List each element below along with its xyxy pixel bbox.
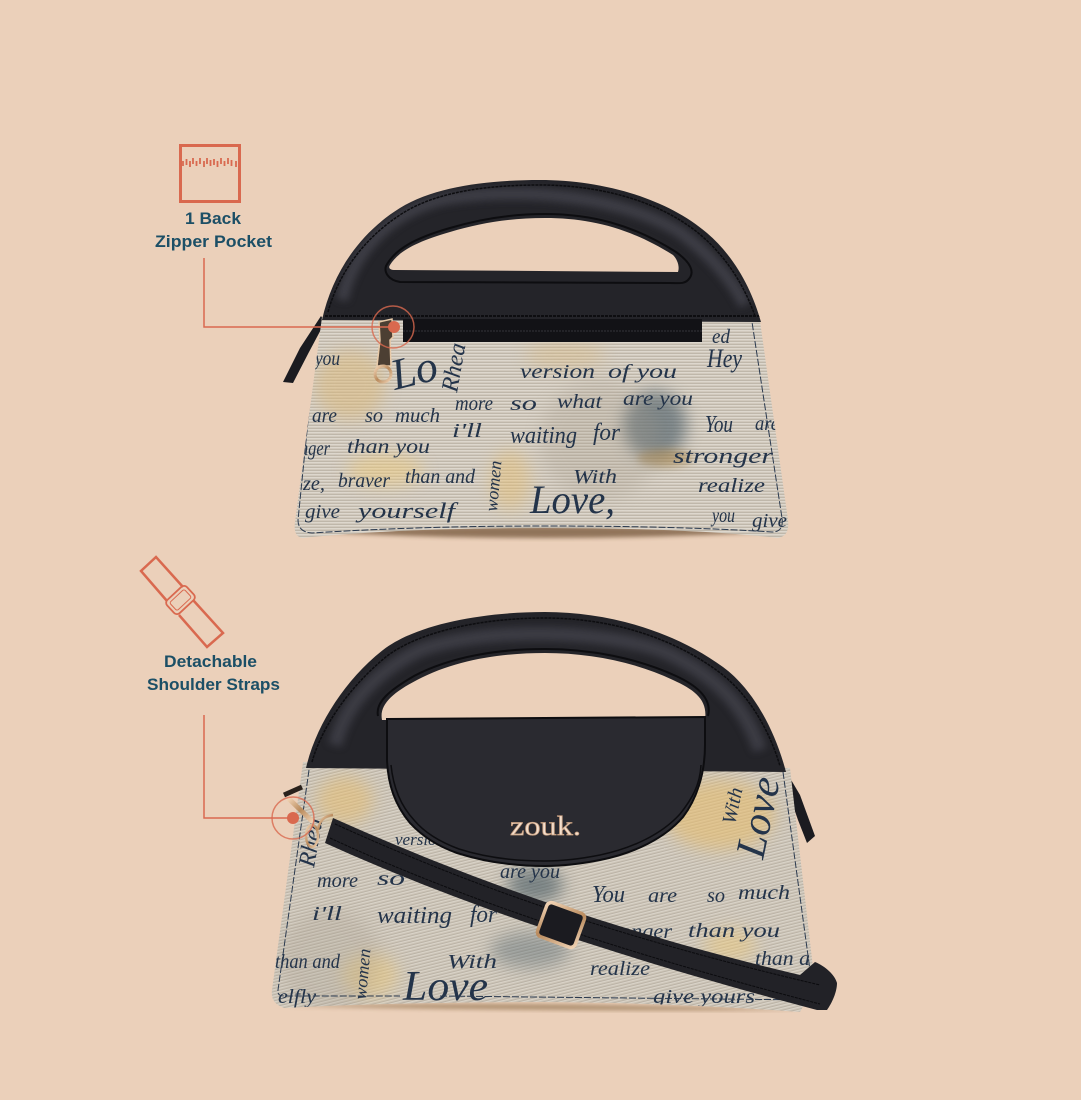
- bag 1 zipper: [403, 319, 702, 342]
- bag 2 handwriting print: realize: [590, 958, 650, 980]
- bag 2 side tab: [790, 778, 815, 843]
- bag 1 handwriting print: Love,: [529, 477, 615, 522]
- bag 2 handwriting print: You: [592, 882, 625, 908]
- bag 2 handwriting print: much: [738, 882, 790, 904]
- bag 2 strap: [325, 818, 837, 1010]
- bag 1 handwriting print: braver: [338, 470, 390, 492]
- bag 1 zipper tab: [283, 316, 325, 383]
- bag 1 handwriting print: are: [312, 405, 337, 427]
- bag 2 flap shading and stitching: [390, 722, 702, 861]
- bag 1 handwriting print: give: [752, 510, 787, 532]
- bag 2 front flap: [387, 717, 705, 866]
- bag 2 logo: zouk: zouk.: [510, 811, 581, 841]
- bag 2 shadow: [285, 1004, 800, 1010]
- bag 1 black handle: [322, 180, 761, 322]
- bag 1 handwriting print: than and: [405, 466, 476, 488]
- bag 1 handwriting print: more: [455, 393, 493, 415]
- bag 2 handwriting print: so: [377, 868, 405, 890]
- bag 1 handwriting print: women: [481, 460, 505, 512]
- bag 1 handwriting print: of you: [608, 361, 677, 383]
- bag 2 handwriting print: are: [648, 885, 677, 907]
- bag 1 zipper pull: [375, 319, 393, 382]
- bag 1 handwriting print: than you: [347, 436, 430, 458]
- bag 2 handwriting print: are you: [500, 861, 560, 883]
- bag 2: front view: [265, 612, 837, 1020]
- bag 2 handwriting print: than and: [275, 951, 341, 973]
- bag 2 handwriting print: onger: [620, 921, 672, 943]
- bag 1 handwriting print: what: [557, 391, 603, 413]
- bag 2 handle highlights and stitching: [312, 618, 780, 766]
- bag 1 handwriting print: You: [705, 412, 733, 438]
- bag 1 handwriting print: yourself: [355, 498, 459, 523]
- label: Detachable Shoulder Straps: Shoulder Straps: [147, 675, 280, 694]
- label: Detachable Shoulder Straps: Detachable: [164, 652, 257, 671]
- bag 1 handwriting print: you: [313, 348, 340, 370]
- bag 1 handwriting print: Rhea: [437, 341, 471, 395]
- bag 2 handwriting print: for: [470, 902, 498, 928]
- bag 2 handwriting print: elfly: [278, 986, 316, 1008]
- label: 1 Back Zipper Pocket: [155, 209, 272, 251]
- bag 2 handwriting print: i'll: [312, 903, 343, 925]
- bag 2 handwriting print: Rhea: [294, 816, 328, 870]
- bag 2 handwriting print: Love: [402, 964, 488, 1010]
- bag 1 handwriting print: are you: [623, 388, 693, 410]
- bag 1 handwriting print: realize: [698, 475, 765, 497]
- bag 1 handwriting print: [298, 322, 787, 533]
- callout: zipper pocket line: [204, 258, 414, 348]
- bag 1 handwriting print: for: [593, 420, 621, 446]
- bag 1 shadow: [320, 526, 770, 538]
- bag 2 handwriting print: than you: [688, 920, 780, 942]
- icon: zipper pocket: [180, 146, 240, 202]
- label: 1 Back Zipper Pocket: Zipper Pocket: [155, 232, 272, 251]
- label: 1 Back Zipper Pocket: 1 Back: [185, 209, 242, 228]
- bag 1 handwriting print: stronger: [673, 443, 774, 468]
- bag 2 handwriting print: With: [718, 786, 748, 826]
- bag 2 handwriting print: give yours: [653, 986, 755, 1008]
- bag 1 handwriting print: version: [520, 361, 595, 383]
- bag 2 handwriting print: more: [317, 870, 358, 892]
- bag 2 black handle: [306, 612, 786, 772]
- bag 1 handwriting print: you: [710, 505, 735, 527]
- bag 2 handwriting print: Love: [728, 773, 790, 863]
- bag 2 handwriting print: so: [707, 885, 725, 907]
- bag 1 handwriting print: Lo: [385, 341, 443, 400]
- bag 1 fabric body: [294, 317, 788, 538]
- bag 1: back view: [280, 180, 800, 545]
- bag 1 handwriting print: nger: [300, 438, 330, 460]
- bag 2 handwriting print: waiting: [377, 903, 452, 929]
- bag 2 handwriting print: than a: [755, 948, 810, 970]
- bag 2 handwriting print: women: [350, 948, 374, 1000]
- bag 2 metal clasp: [284, 787, 333, 847]
- bag 1 handwriting print: Hey: [706, 344, 742, 373]
- callout: detachable straps line: [204, 715, 314, 839]
- bag 1 handwriting print: are: [755, 413, 779, 435]
- bag 1 handle highlights and stitching: [325, 185, 760, 316]
- bag 2 handwriting print: version: [395, 830, 445, 849]
- bag 1 handwriting print: With: [573, 466, 617, 488]
- label: Detachable Shoulder Straps: [147, 652, 280, 694]
- bag 1 handwriting print: i'll: [452, 420, 483, 442]
- bag 2 handwriting print: With: [447, 951, 497, 973]
- bag 1 handwriting print: give: [305, 501, 340, 523]
- bag 1 handwriting print: so: [365, 405, 383, 427]
- bag 2 fabric body: [265, 755, 825, 1020]
- bag 1 handwriting print: ze,: [302, 473, 325, 495]
- bag 1 handwriting print: much: [395, 405, 440, 427]
- bag 1 handwriting print: ed: [712, 326, 731, 348]
- bag 2 handwriting print: [275, 770, 812, 1010]
- bag 2 strap buckle: [536, 901, 586, 949]
- icon: shoulder strap: [141, 557, 223, 647]
- bag 1 handwriting print: so: [510, 393, 537, 415]
- bag 1 handwriting print: waiting: [510, 423, 577, 449]
